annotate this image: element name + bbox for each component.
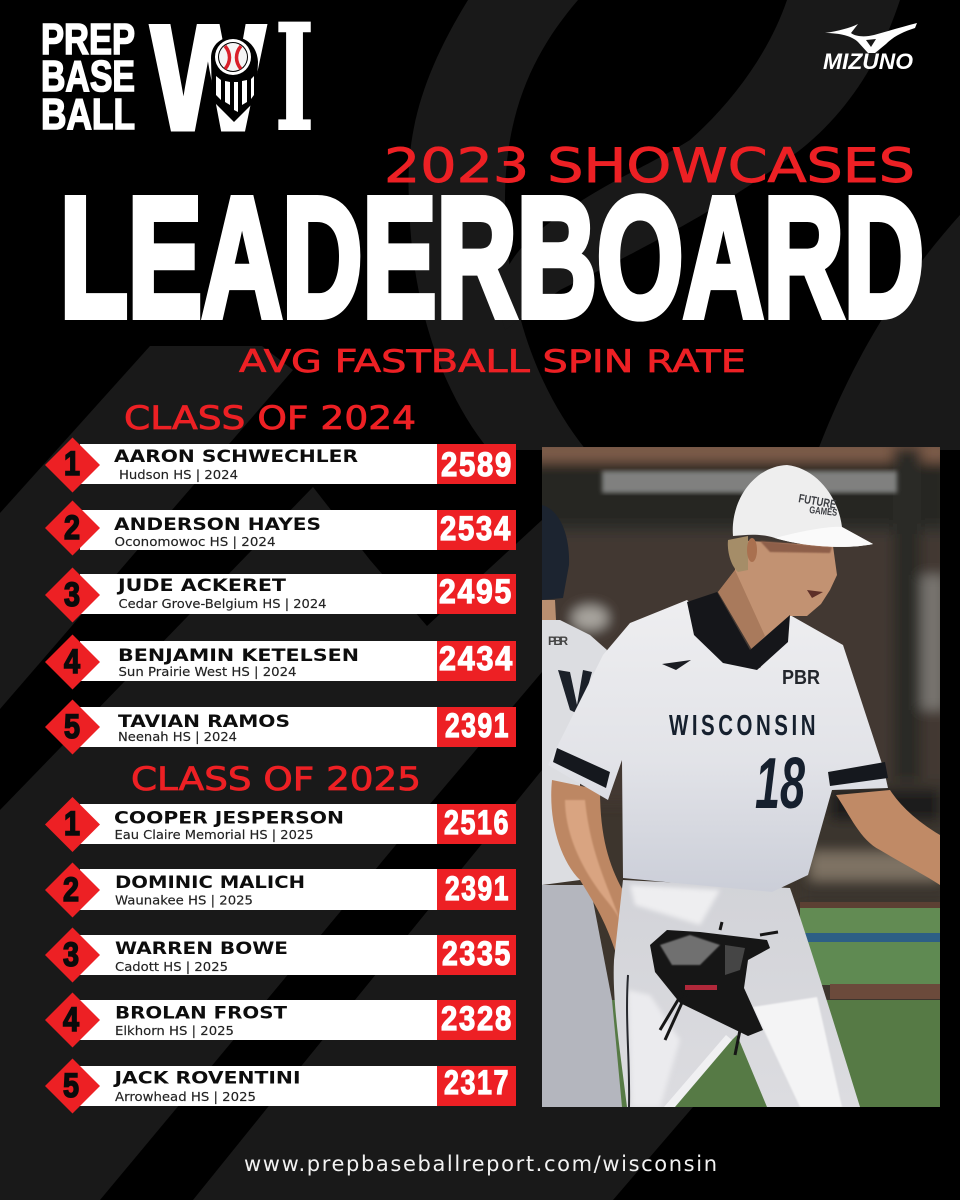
logo: Mizuno — [823, 23, 917, 74]
row: 2024 rank 2: 2 — [64, 509, 80, 547]
row: 2024 rank 5: 5 — [64, 708, 80, 746]
photo: Wisconsin pitcher holding a glove — [530, 440, 950, 1107]
row: 2025 rank 5: Arrowhead HS | 2025 — [115, 1089, 256, 1104]
row: 2025 rank 4 — [45, 992, 516, 1048]
row: 2024 rank 3: JUDE ACKERET — [117, 576, 287, 595]
row: 2025 rank 3: Cadott HS | 2025 — [115, 959, 228, 974]
row: 2024 rank 4: 4 — [64, 643, 80, 681]
row: 2025 rank 4: 2328 — [441, 1000, 513, 1038]
row: 2025 rank 5 — [45, 1058, 516, 1114]
row: 2025 rank 1: 1 — [64, 805, 80, 843]
photo: black undershirt collar — [687, 592, 790, 670]
logo wordmark: PREP BASE BALL — [41, 15, 135, 139]
photo: teammate in background: PBR — [548, 634, 568, 648]
row: 2024 rank 5: Neenah HS | 2024 — [118, 729, 237, 744]
row: 2024 rank 4: BENJAMIN KETELSEN — [118, 646, 359, 665]
logo wordmark: PREP BASE BALL: PREP — [41, 15, 135, 64]
row: 2024 rank 3: 2495 — [439, 573, 513, 611]
photo: jersey lettering: 18 — [755, 744, 805, 824]
logo wordmark: PREP BASE BALL: BALL — [41, 90, 135, 139]
row: 2024 rank 2 — [45, 500, 516, 556]
photo: white cap — [733, 465, 873, 547]
row: 2025 rank 5: JACK ROVENTINI — [113, 1068, 300, 1088]
logo icon: baseball with bat handle — [211, 37, 258, 122]
logo wordmark: PREP BASE BALL: BASE — [41, 52, 135, 101]
row: 2024 rank 1: 1 — [64, 445, 80, 483]
row: 2024 rank 1: Hudson HS | 2024 — [119, 467, 238, 482]
row: 2025 rank 1: COOPER JESPERSON — [114, 808, 344, 828]
photo: white cap: FUTURE — [797, 491, 837, 512]
heading: Class of 2025: CLASS OF 2025 — [131, 760, 421, 798]
row: 2025 rank 3: 3 — [63, 936, 79, 974]
photo: jersey lettering: WISCONSIN — [669, 710, 819, 742]
row: 2024 rank 4: 2434 — [439, 640, 514, 678]
subtitle: Avg fastball spin rate: AVG FASTBALL SPIN RATE — [239, 344, 746, 380]
photo: white cap: GAMES — [809, 505, 838, 519]
row: 2024 rank 5: TAVIAN RAMOS — [118, 712, 290, 731]
photo: teammate in background — [542, 505, 622, 1107]
row: 2024 rank 1: 2589 — [441, 446, 513, 484]
photo: pants piping — [627, 975, 629, 1107]
row: 2025 rank 1: 2516 — [444, 804, 510, 842]
photo: arms — [551, 780, 940, 992]
row: 2025 rank 4: 4 — [63, 1001, 79, 1039]
heading: Class of 2024: CLASS OF 2024 — [124, 399, 416, 437]
row: 2024 rank 1 — [45, 438, 516, 492]
row: 2025 rank 2: 2 — [63, 871, 79, 909]
row: 2024 rank 2: Oconomowoc HS | 2024 — [114, 534, 276, 549]
row: 2024 rank 2: 2534 — [440, 510, 512, 548]
row: 2024 rank 3: 3 — [64, 576, 80, 614]
logo: Prep Baseball WI — [41, 0, 314, 164]
row: 2024 rank 5 — [45, 700, 516, 754]
row: 2025 rank 1 — [45, 797, 516, 852]
photo: sleeve bands — [553, 748, 888, 788]
photo: pants — [614, 880, 860, 1107]
logo: Mizuno: MIZUNO — [823, 49, 913, 74]
row: 2025 rank 3 — [45, 928, 516, 982]
row: 2024 rank 2: ANDERSON HAYES — [114, 515, 321, 534]
row: 2025 rank 3: WARREN BOWE — [115, 939, 288, 958]
row: 2024 rank 4: Sun Prairie West HS | 2024 — [118, 664, 297, 679]
footer: website URL: www.prepbaseballreport.com/wisconsin — [244, 1152, 717, 1176]
row: 2025 rank 5: 5 — [63, 1067, 79, 1105]
row: 2025 rank 4: BROLAN FROST — [115, 1004, 288, 1022]
row: 2025 rank 2: 2391 — [445, 870, 510, 908]
row: 2025 rank 5: 2317 — [444, 1064, 510, 1102]
photo: jersey — [548, 600, 888, 892]
row: 2025 rank 2: DOMINIC MALICH — [115, 873, 305, 892]
heading: 2023 Showcases: 2023 SHOWCASES — [384, 139, 915, 194]
photo: jersey lettering: PBR — [782, 667, 820, 689]
row: 2025 rank 3: 2335 — [442, 935, 512, 973]
photo: jersey lettering — [662, 660, 820, 824]
row: 2024 rank 4 — [45, 634, 516, 690]
photo backdrop: dugout and field — [530, 440, 950, 1107]
row: 2024 rank 3 — [45, 568, 516, 622]
row: 2025 rank 2: Waunakee HS | 2025 — [115, 892, 253, 908]
row: 2025 rank 4: Elkhorn HS | 2025 — [115, 1023, 234, 1038]
row: 2025 rank 2 — [45, 862, 516, 918]
row: 2024 rank 1: AARON SCHWECHLER — [114, 447, 358, 466]
row: 2025 rank 1: Eau Claire Memorial HS | 2025 — [114, 827, 314, 842]
photo: black glove — [650, 922, 778, 1055]
icon: Mizuno bird — [825, 23, 917, 53]
row: 2024 rank 3: Cedar Grove-Belgium HS | 2024 — [118, 596, 327, 611]
row: 2024 rank 5: 2391 — [445, 707, 510, 745]
photo: neck and face — [718, 536, 837, 652]
